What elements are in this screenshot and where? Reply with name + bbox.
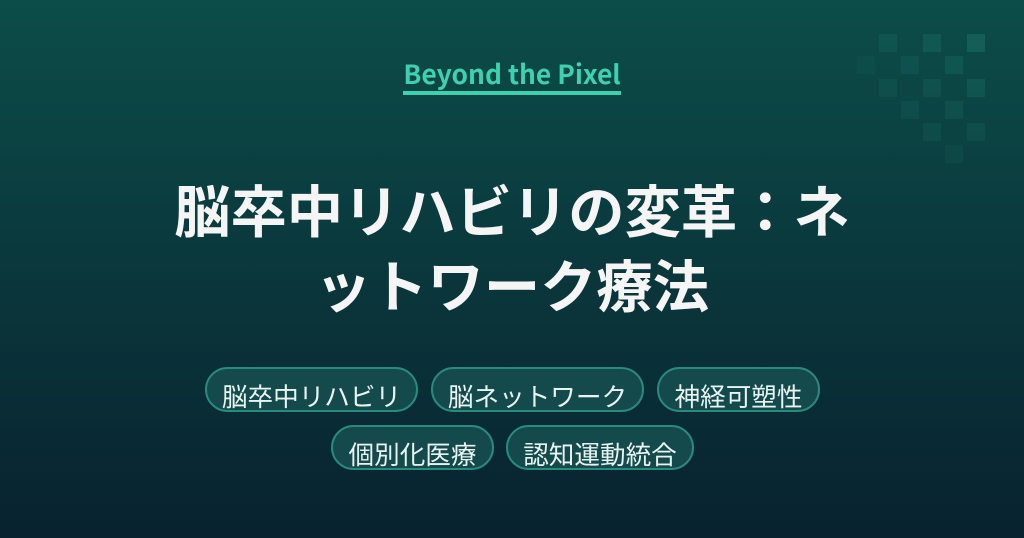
tag: 認知運動統合: 認知運動統合 [523,435,677,472]
title [174,168,850,324]
tag: 脳卒中リハビリ: 脳卒中リハビリ [222,377,401,414]
decorative pixel grid [879,34,985,141]
tag: 脳ネットワーク [431,367,644,412]
title: ットワーク療法 [315,243,709,324]
tag: 神経可塑性 [657,367,820,412]
tag: 認知運動統合 [506,425,694,470]
tag: 脳ネットワーク: 脳ネットワーク [448,377,627,414]
tag: 個別化医療: 個別化医療 [348,435,476,472]
tag: 脳卒中リハビリ [205,367,418,412]
tag row 2 [331,425,694,472]
tag row 1 [205,367,820,414]
brand label: Beyond the Pixel: Beyond the Pixel [403,53,621,92]
tag: 神経可塑性: 神経可塑性 [674,377,802,414]
tag: 個別化医療 [331,425,494,470]
title: 脳卒中リハビリの変革：ネ [174,168,850,249]
